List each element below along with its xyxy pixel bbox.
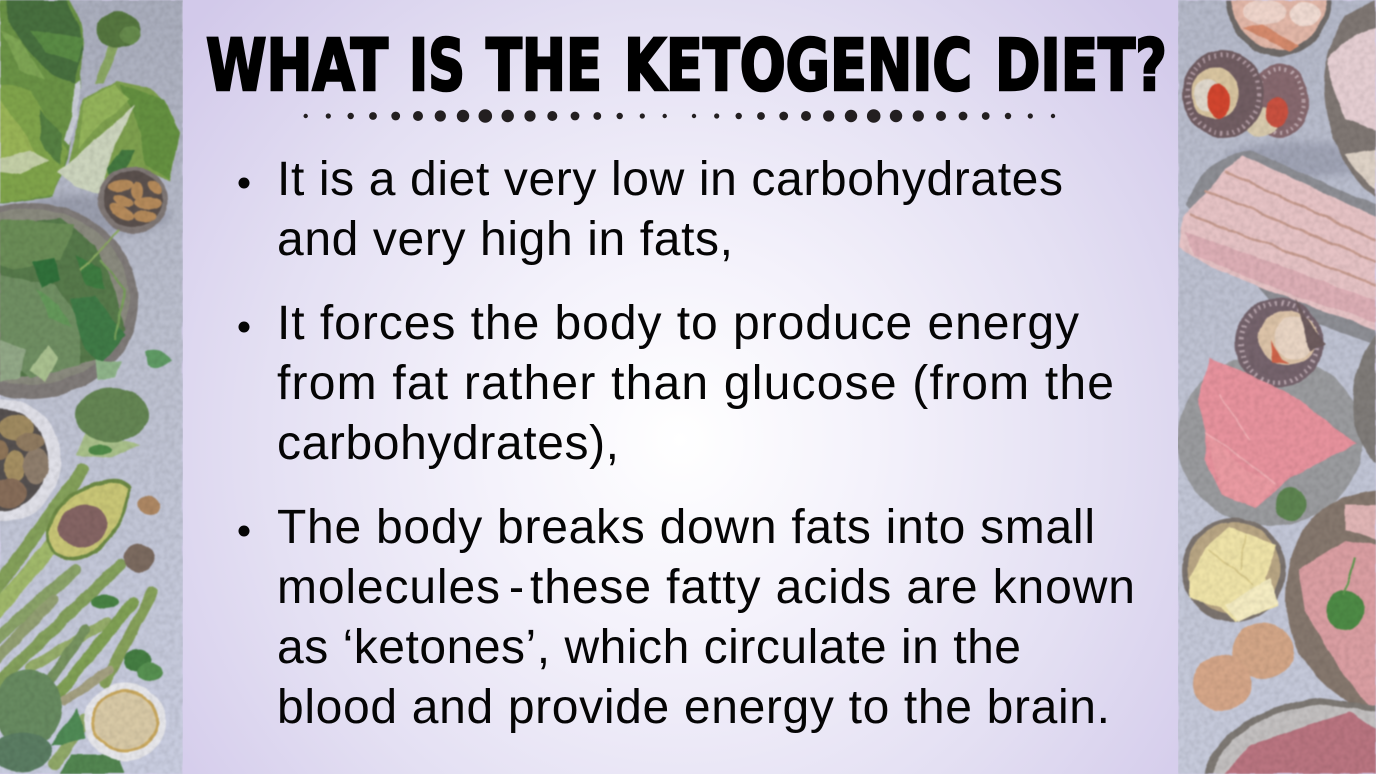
text block: bullet 1: It is a diet very low in carbohydrates — [277, 153, 1063, 206]
icon: small leaf — [145, 350, 172, 368]
icon: scallop shell — [1235, 298, 1325, 388]
icon: sauce bowl — [84, 683, 166, 761]
icon: olive bowl — [0, 399, 61, 521]
text block: bullet 3: these fatty acids are known — [530, 561, 1135, 614]
icon: bacon slices — [1179, 155, 1376, 330]
icon: scallop shells pair — [1182, 50, 1309, 138]
icon: tuna steak — [1198, 358, 1356, 508]
icon: meat plate — [1286, 490, 1376, 716]
text block: bullet 1 — [238, 153, 1063, 266]
icon: right plate edge — [1353, 335, 1376, 464]
icon: minced meat bowl — [1204, 698, 1376, 774]
panel: right food photo (meat and seafood) — [1177, 0, 1376, 774]
icon: asparagus bundle — [0, 470, 153, 764]
icon: nuts — [124, 493, 163, 572]
icon: lettuce leaf — [57, 81, 180, 195]
title — [206, 24, 1167, 107]
icon: chicken plate — [1324, 0, 1376, 198]
text block: bullet 3: The body breaks down fats into small — [277, 501, 1095, 554]
title: IS — [409, 24, 465, 107]
title: THE — [486, 24, 602, 107]
title: WHAT — [206, 24, 388, 107]
icon: green leaves — [91, 595, 163, 681]
text block: bullet 3 — [238, 501, 1135, 734]
text block: bullet 3: - — [509, 561, 524, 614]
icon: broccoli bottom — [0, 670, 125, 774]
text block: bullet 2: from fat rather than glucose (from the — [277, 357, 1114, 410]
dotted divider — [304, 109, 1055, 123]
text block: bullet 2: carbohydrates), — [277, 417, 619, 470]
text block: bullet 2: It forces the body to produce energy — [277, 297, 1079, 350]
icon: almond bowl — [98, 167, 168, 233]
icon: butter bowl — [1182, 518, 1286, 622]
icon: stone plate behind bacon — [1186, 150, 1376, 345]
title: KETOGENIC — [624, 24, 972, 107]
panel: left food photo (vegetables) — [0, 0, 183, 774]
icon: leaf on tuna plate — [1276, 487, 1306, 521]
icon: avocado half — [47, 479, 131, 560]
text block: bullet 3: as ‘ketones’, which circulate in the — [277, 621, 1021, 674]
text block: bullet 1: and very high in fats, — [277, 213, 733, 266]
panel: central text panel — [183, 0, 1178, 774]
icon: lettuce top left — [0, 0, 83, 204]
text block: bullet 3: molecules — [277, 561, 500, 614]
icon: broccoli middle — [75, 388, 149, 458]
icon: broccoli top — [95, 12, 140, 84]
title: DIET? — [995, 24, 1167, 107]
icon: stone plate under tuna — [1177, 354, 1363, 526]
icon: shrimp bowl — [1226, 0, 1332, 57]
icon: broccoli and greens bowl — [0, 203, 138, 399]
icon: eggs — [1193, 623, 1294, 711]
text block: bullet 3: blood and provide energy to the brain. — [277, 681, 1110, 734]
text block: bullet 2 — [238, 297, 1114, 470]
